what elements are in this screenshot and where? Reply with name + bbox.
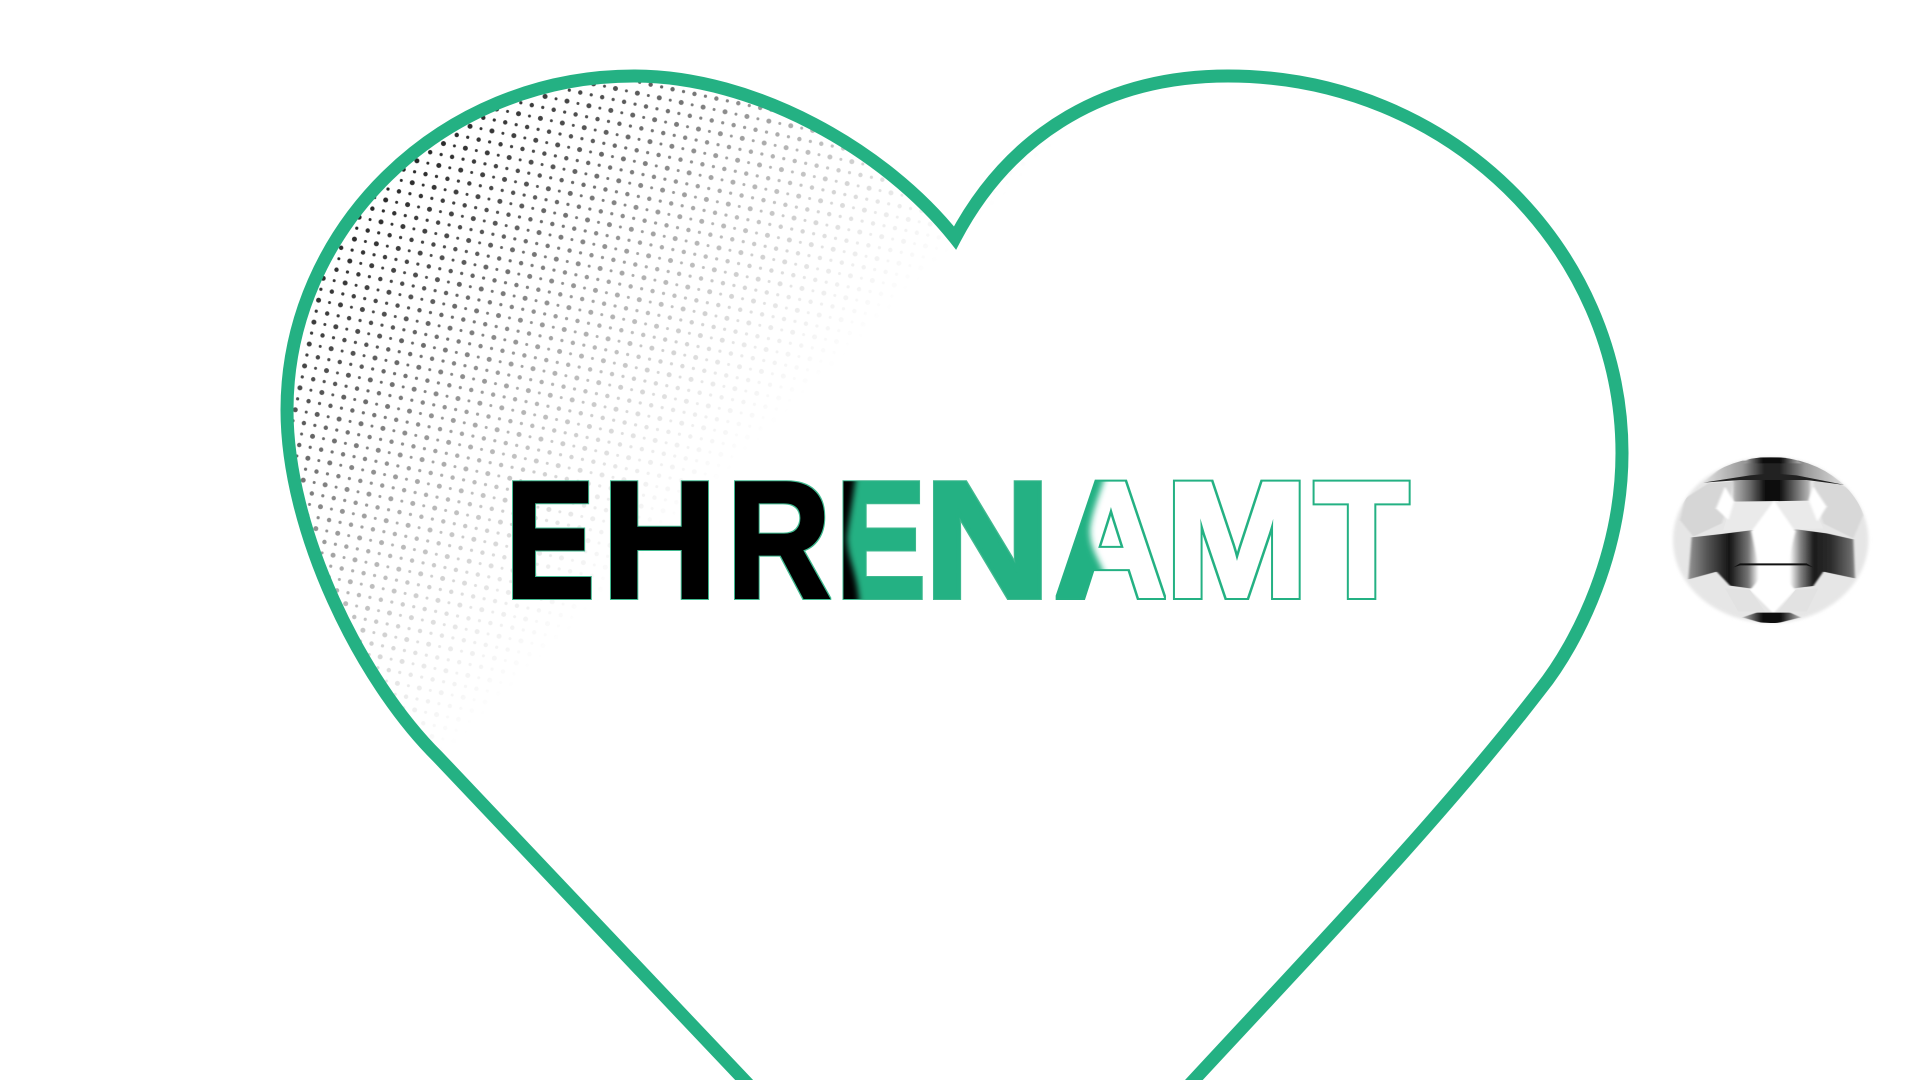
title: EHRENAMT: H [602,448,717,633]
title: EHRENAMT: N [924,448,1051,633]
halftone dot shading [294,82,932,726]
title: EHRENAMT: A [1056,449,1166,632]
title: EHRENAMT: R [727,448,831,633]
heart outline [287,76,1622,1080]
icon: blurred spinning football [1673,457,1868,623]
title: EHRENAMT: E [506,447,595,633]
title: EHRENAMT: M [1165,448,1308,631]
title: EHRENAMT: E [836,448,926,634]
title: EHRENAMT [506,447,1409,634]
title: EHRENAMT: T [1314,448,1409,631]
